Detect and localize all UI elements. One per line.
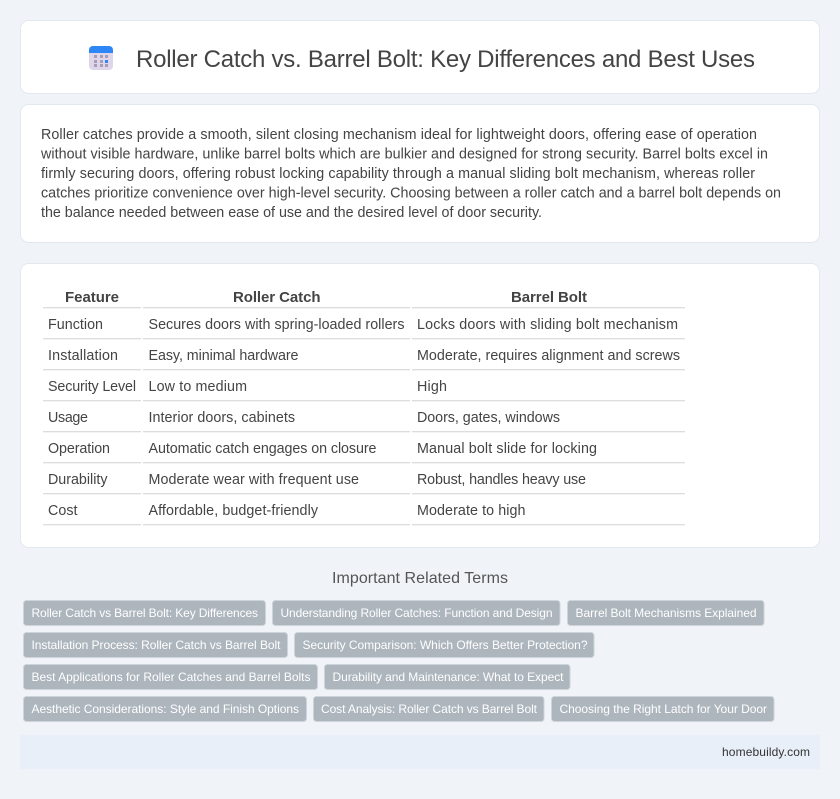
- tag: [552, 696, 774, 722]
- row: durability: [48, 472, 586, 488]
- tag: Security Comparison: Which Offers Better Protection?: [302, 638, 588, 652]
- text block: summary: [40, 127, 781, 221]
- row: operation: Manual bolt slide for locking: [417, 441, 597, 457]
- tag: Installation Process: Roller Catch vs Barrel Bolt: [32, 638, 281, 652]
- tag: Roller Catch vs Barrel Bolt: Key Differences: [32, 606, 258, 620]
- text block: summary: catches prioritize convenience over high-level security. Choosing between a roller catch and a barrel bolt depends on: [41, 186, 781, 202]
- row: security level: Security Level: [48, 379, 136, 395]
- tag: Understanding Roller Catches: Function and Design: [280, 606, 552, 620]
- row: cost: Cost: [48, 503, 78, 519]
- table header: [65, 289, 587, 306]
- footer: homebuildy.com: [722, 745, 810, 759]
- panel: comparison table: [20, 264, 820, 548]
- row: function: Function: [48, 317, 103, 333]
- row: installation: [48, 348, 680, 364]
- row: durability: Durability: [48, 472, 108, 488]
- tag: Durability and Maintenance: What to Expect: [332, 670, 564, 684]
- row: cost: [48, 503, 526, 519]
- row: usage: Doors, gates, windows: [417, 410, 560, 426]
- row: cost: Affordable, budget-friendly: [148, 503, 319, 519]
- row: usage: [48, 410, 560, 426]
- row: usage: Interior doors, cabinets: [148, 410, 295, 426]
- tag: Best Applications for Roller Catches and Barrel Bolts: [32, 670, 310, 684]
- row: durability: Moderate wear with frequent use: [148, 472, 359, 488]
- row: security level: Low to medium: [148, 379, 247, 395]
- tag: Choosing the Right Latch for Your Door: [560, 702, 767, 716]
- row: security level: [48, 379, 447, 395]
- text block: summary: without visible hardware, unlike barrel bolts which are bulkier and designed for strong security. Barrel bolts excel in: [40, 146, 768, 162]
- row: security level: High: [417, 379, 447, 395]
- tag: [24, 696, 306, 722]
- row: usage: Usage: [48, 410, 88, 426]
- row: durability: Robust, handles heavy use: [417, 472, 586, 488]
- panel: title header: [20, 20, 820, 94]
- footer: [20, 735, 820, 769]
- tag: [568, 600, 764, 626]
- row: operation: [48, 441, 597, 457]
- row: operation: Operation: [48, 441, 110, 457]
- row: installation: Easy, minimal hardware: [148, 348, 299, 364]
- row: installation: Installation: [48, 348, 118, 364]
- table header: Roller Catch: [233, 289, 320, 306]
- row: function: Secures doors with spring-loaded rollers: [148, 317, 404, 333]
- tag: [314, 696, 544, 722]
- tag: [24, 632, 288, 658]
- text block: summary: firmly securing doors, offering robust locking capability through a manual sliding bolt mechanism, whereas roller: [41, 166, 755, 182]
- row: function: [48, 317, 678, 333]
- tag: Cost Analysis: Roller Catch vs Barrel Bolt: [321, 702, 538, 716]
- text block: summary: Roller catches provide a smooth, silent closing mechanism ideal for lightweight doors, offering ease of operation: [41, 127, 757, 143]
- row: function: Locks doors with sliding bolt mechanism: [417, 317, 678, 333]
- title: Roller Catch vs. Barrel Bolt: Key Differences and Best Uses: [136, 46, 755, 73]
- tag: [324, 664, 570, 690]
- tag: Aesthetic Considerations: Style and Finish Options: [32, 702, 299, 716]
- heading: related terms: Important Related Terms: [332, 570, 508, 587]
- panel: summary paragraph: [20, 104, 820, 242]
- text block: summary: the balance needed between ease of use and the desired level of door security.: [41, 205, 542, 221]
- icon: calendar: [89, 46, 113, 70]
- tag: Barrel Bolt Mechanisms Explained: [576, 606, 756, 620]
- panel: related term tags: [24, 600, 774, 722]
- tag: [24, 600, 266, 626]
- table header: Feature: [65, 289, 119, 306]
- table header: Barrel Bolt: [511, 289, 587, 306]
- tag: [24, 664, 318, 690]
- row: operation: Automatic catch engages on closure: [148, 441, 377, 457]
- tag: [272, 600, 560, 626]
- row: installation: Moderate, requires alignment and screws: [417, 348, 680, 364]
- row: cost: Moderate to high: [417, 503, 526, 519]
- tag: [294, 632, 594, 658]
